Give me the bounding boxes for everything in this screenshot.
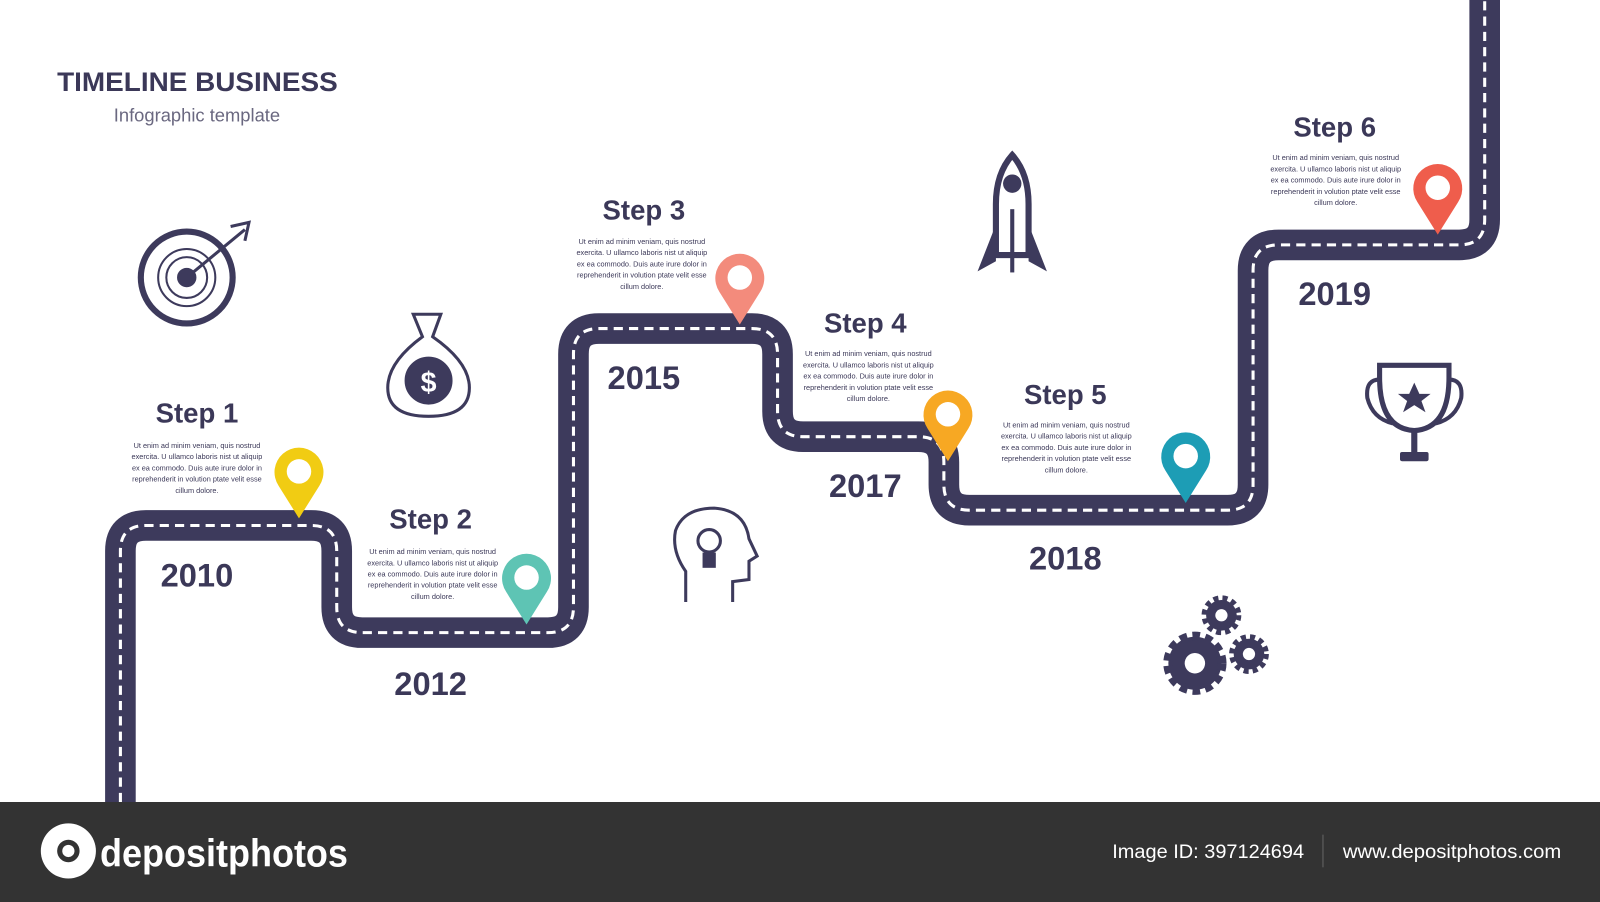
step 6: cillum dolore.: [1314, 198, 1357, 207]
step 4: [803, 308, 934, 504]
step 5: cillum dolore.: [1045, 465, 1088, 474]
icon: target: [141, 222, 249, 323]
step 1: Ut enim ad minim veniam, quis nostrud: [134, 441, 260, 450]
step 6: Ut enim ad minim veniam, quis nostrud: [1272, 153, 1399, 162]
icon: money bag: $: [421, 367, 437, 399]
step 2: cillum dolore.: [411, 592, 454, 601]
step 3: exercita. U ullamco laboris nist ut aliquip: [576, 248, 707, 257]
icon: head with bulb: [675, 508, 757, 602]
footer bar: www.depositphotos.com: [1342, 841, 1561, 863]
step 5: reprehenderit in volution ptate velit esse: [1002, 454, 1131, 463]
step 3: ex ea commodo. Duis aute irure dolor in: [577, 259, 707, 268]
step 5: ex ea commodo. Duis aute irure dolor in: [1001, 443, 1131, 452]
step 1: cillum dolore.: [175, 486, 219, 495]
icon: money bag: [388, 314, 469, 416]
step 4: Step 4: [824, 308, 907, 339]
title: Infographic template: [114, 104, 280, 125]
step 1: Step 1: [156, 397, 238, 428]
step 4: ex ea commodo. Duis aute irure dolor in: [803, 372, 933, 381]
pin: red: [1413, 164, 1462, 235]
step 2: [367, 504, 498, 702]
step 2: reprehenderit in volution ptate velit esse: [368, 581, 497, 590]
step 1: ex ea commodo. Duis aute irure dolor in: [132, 463, 262, 472]
road: [120, 0, 1485, 802]
footer bar: depositphotos: [100, 832, 348, 875]
footer bar: [0, 802, 1600, 902]
step 1: 2010: [161, 557, 233, 594]
title: TIMELINE BUSINESS: [57, 67, 338, 97]
step 6: reprehenderit in volution ptate velit esse: [1271, 187, 1400, 196]
step 2: Ut enim ad minim veniam, quis nostrud: [369, 547, 496, 556]
step 3: cillum dolore.: [620, 282, 663, 291]
step 5: 2018: [1029, 539, 1102, 576]
step 6: Step 6: [1293, 112, 1376, 143]
step 5: [1001, 379, 1132, 576]
step 4: cillum dolore.: [847, 394, 890, 403]
pin: orange: [923, 391, 972, 461]
step 3: Ut enim ad minim veniam, quis nostrud: [578, 237, 705, 246]
icon: rocket: [978, 155, 1047, 272]
pin: yellow: [274, 448, 323, 518]
step 2: 2012: [394, 665, 467, 702]
step 3: reprehenderit in volution ptate velit esse: [577, 271, 707, 280]
footer bar: Image ID: 397124694: [1112, 841, 1304, 863]
step 5: Ut enim ad minim veniam, quis nostrud: [1003, 421, 1130, 430]
icon: gears: [1168, 598, 1266, 690]
pin: salmon: [715, 254, 764, 324]
step 1: reprehenderit in volution ptate velit esse: [132, 475, 262, 484]
icon: trophy: [1367, 365, 1461, 461]
step 4: exercita. U ullamco laboris nist ut aliquip: [803, 360, 934, 369]
title: [57, 67, 338, 125]
step 6: ex ea commodo. Duis aute irure dolor in: [1271, 176, 1401, 185]
step 3: [576, 194, 707, 396]
step 2: exercita. U ullamco laboris nist ut aliquip: [367, 558, 498, 567]
step 4: Ut enim ad minim veniam, quis nostrud: [805, 349, 932, 358]
step 4: reprehenderit in volution ptate velit esse: [804, 383, 933, 392]
step 3: Step 3: [603, 194, 685, 225]
step 6: 2019: [1298, 275, 1371, 312]
step 1: exercita. U ullamco laboris nist ut aliquip: [132, 452, 262, 461]
step 3: 2015: [608, 359, 680, 396]
pin: blue: [1161, 432, 1210, 503]
step 1: [132, 397, 262, 594]
step 2: ex ea commodo. Duis aute irure dolor in: [368, 570, 498, 579]
step 5: exercita. U ullamco laboris nist ut aliquip: [1001, 432, 1132, 441]
step 5: Step 5: [1024, 379, 1107, 410]
step 2: Step 2: [389, 504, 472, 535]
step 4: 2017: [829, 467, 902, 504]
pin: teal: [502, 554, 551, 624]
step 6: [1270, 112, 1401, 312]
step 6: exercita. U ullamco laboris nist ut aliquip: [1270, 164, 1401, 173]
